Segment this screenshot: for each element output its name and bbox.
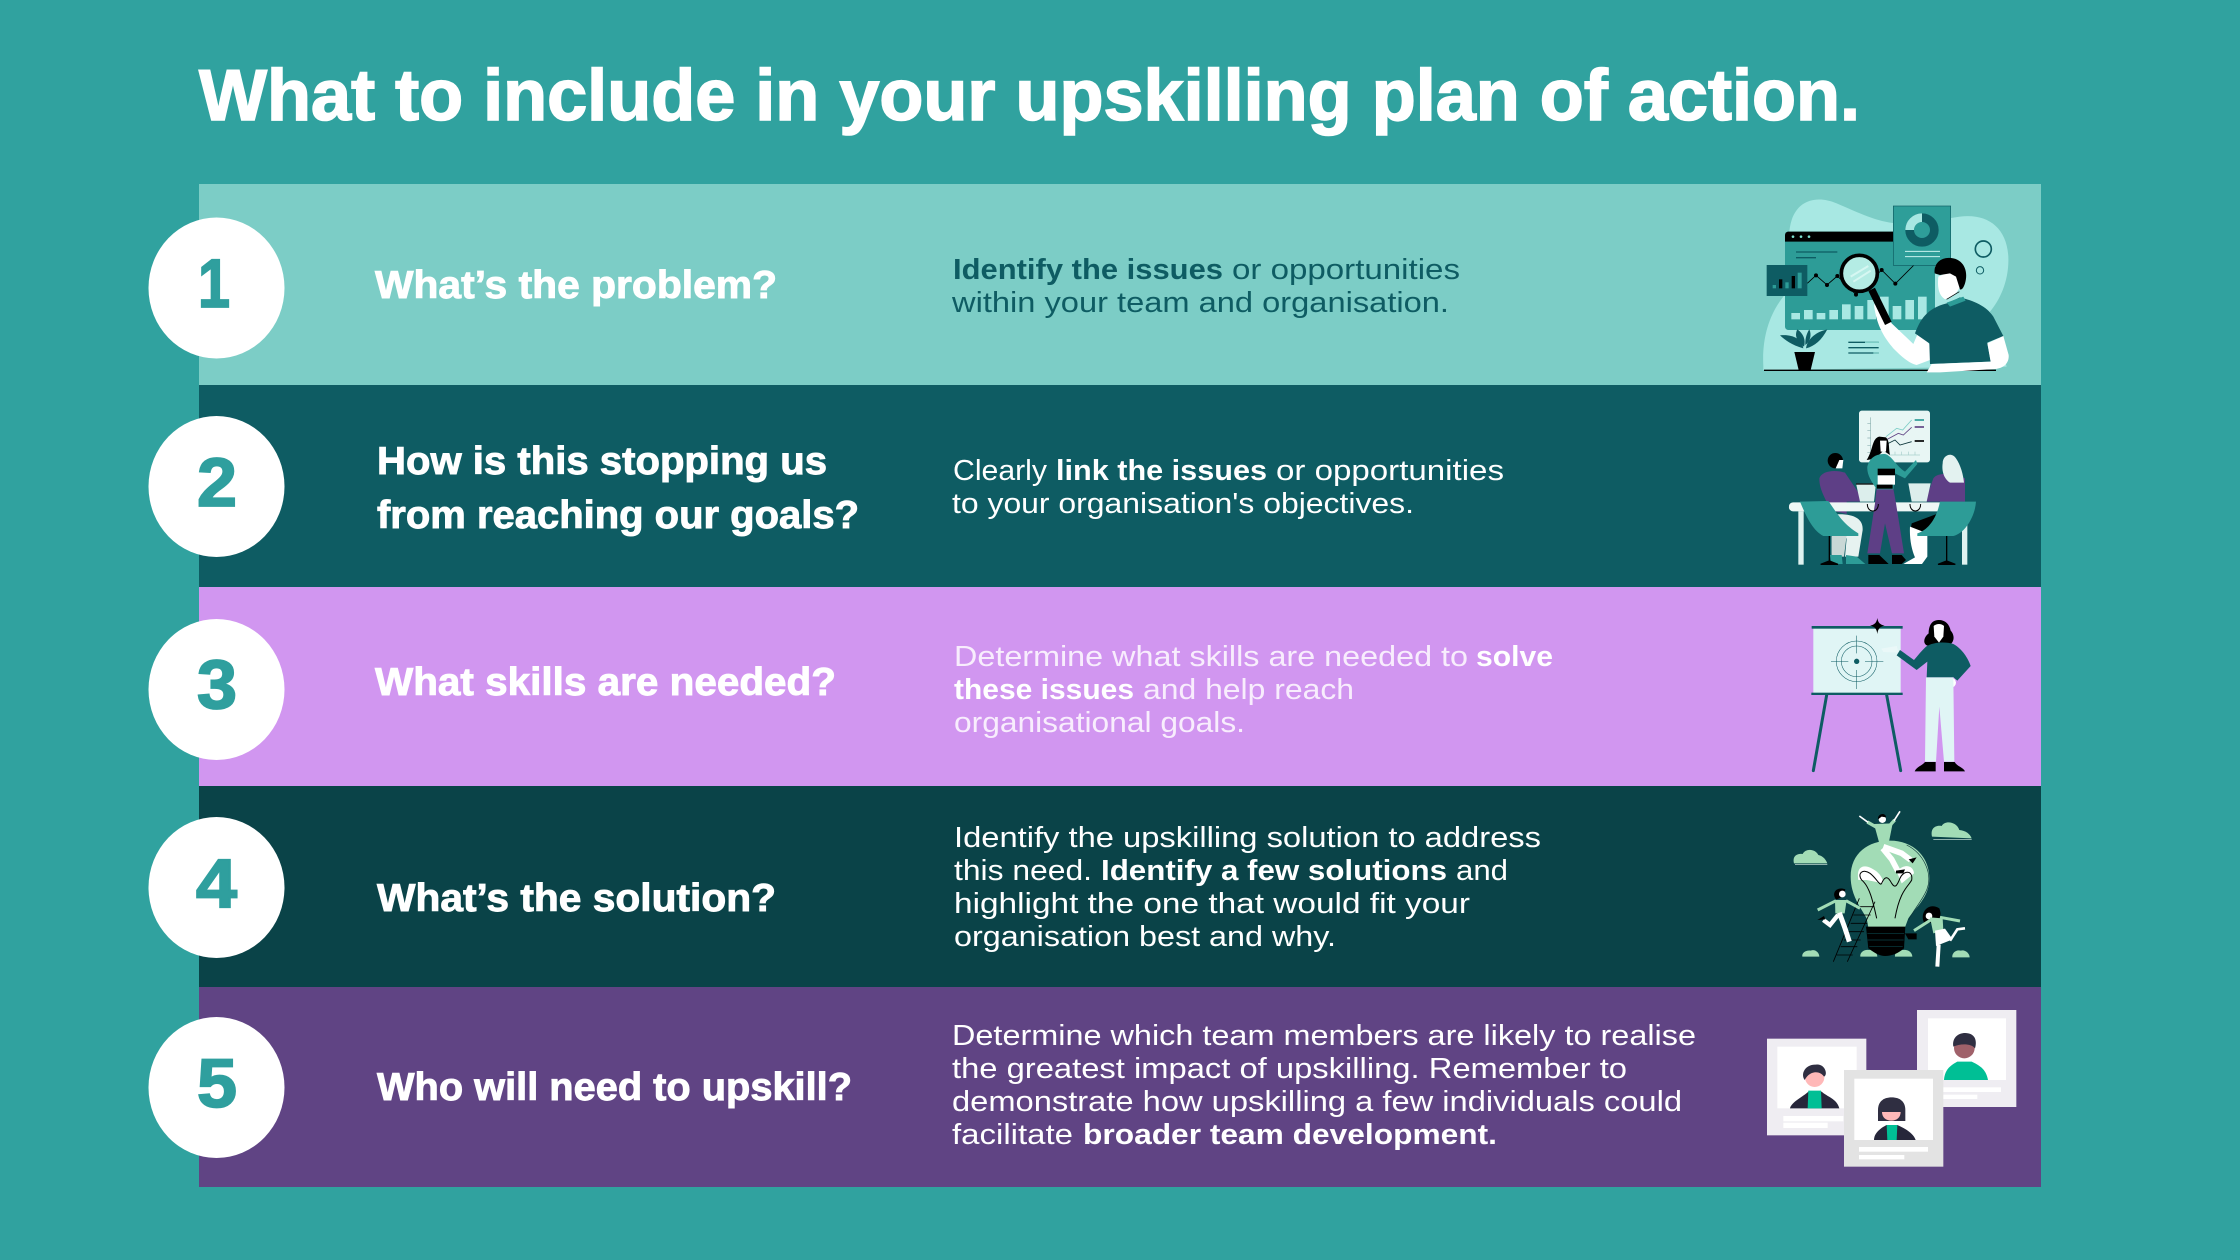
heading: row 2: [377, 440, 859, 537]
icon: team member profile cards: [1767, 1010, 2016, 1167]
panel: row 2 background: [199, 385, 2041, 587]
text block: row 4: highlight the one that would fit your: [954, 888, 1470, 920]
text block: row 2: [952, 455, 1504, 520]
step 4 badge: [148, 817, 284, 958]
text block: row 5: the greatest impact of upskilling. Remember to: [952, 1053, 1627, 1085]
text block: row 4: and: [1456, 855, 1508, 887]
card: right profile: [1917, 1010, 2016, 1107]
step 1 badge: 1: [198, 245, 230, 322]
panel: row 4 background: [199, 786, 2041, 987]
heading: row 4: What’s the solution?: [377, 877, 776, 920]
text block: row 4: Identify a few solutions: [1101, 855, 1447, 887]
figure: person on top of bulb: [1859, 811, 1917, 873]
step 4 badge: 4: [196, 845, 237, 922]
icon: presenter with target board: [1811, 618, 1971, 771]
icon: team meeting: [1789, 411, 1976, 565]
text block: row 5: broader team development.: [1083, 1119, 1497, 1151]
text block: row 3: Determine what skills are needed to: [954, 641, 1468, 673]
card: centre profile: [1844, 1070, 1943, 1167]
text block: row 5: Determine which team members are likely to realise: [952, 1020, 1696, 1052]
text block: row 3: solve: [1476, 641, 1553, 673]
card: left profile: [1767, 1039, 1866, 1135]
text block: row 3: these issues: [954, 674, 1134, 706]
step 5 badge: [148, 1017, 284, 1158]
text block: row 1: or opportunities: [1232, 254, 1460, 286]
step 2 badge: 2: [197, 444, 237, 521]
heading: row 2: from reaching our goals?: [377, 494, 859, 537]
heading: row 1: What’s the problem?: [375, 264, 777, 307]
step 3 badge: 3: [197, 646, 237, 723]
panel: row 3 background: [199, 587, 2041, 786]
text block: row 3: [954, 641, 1553, 739]
text block: row 2: to your organisation's objectives.: [952, 488, 1414, 520]
panel: row 5 background: [199, 987, 2041, 1187]
text block: row 1: [951, 254, 1460, 319]
text block: row 4: Identify the upskilling solution to address: [954, 822, 1541, 854]
text block: row 2: link the issues: [1056, 455, 1267, 487]
panel: row 1 background: [199, 184, 2041, 385]
text block: row 2: Clearly: [953, 455, 1048, 487]
figure: person on ladder: [1817, 888, 1860, 942]
heading: row 3: What skills are needed?: [375, 661, 836, 704]
text block: row 4: organisation best and why.: [954, 921, 1336, 953]
text block: row 5: [952, 1020, 1696, 1151]
text block: row 4: [954, 822, 1541, 953]
step 1 badge: [148, 218, 284, 358]
text block: row 3: and help reach: [1143, 674, 1354, 706]
text block: row 1: within your team and organisation.: [951, 287, 1449, 319]
heading: row 2: How is this stopping us: [377, 440, 827, 483]
text block: row 1: Identify the issues: [953, 254, 1223, 286]
step 5 badge: 5: [197, 1045, 237, 1122]
text block: row 4: this need.: [954, 855, 1092, 887]
text block: row 2: or opportunities: [1276, 455, 1504, 487]
icon: team around lightbulb: [1794, 811, 1972, 967]
text block: row 5: facilitate: [952, 1119, 1073, 1151]
text block: row 5: demonstrate how upskilling a few individuals could: [952, 1086, 1682, 1118]
step 2 badge: [148, 416, 284, 557]
title: What to include in your upskilling plan of action.: [199, 56, 1860, 136]
figure: person watering bulb: [1905, 906, 1965, 967]
icon: analyst with magnifier and dashboard: [1763, 199, 2009, 372]
step 3 badge: [148, 619, 284, 760]
heading: row 5: Who will need to upskill?: [377, 1066, 852, 1109]
text block: row 3: organisational goals.: [954, 707, 1245, 739]
